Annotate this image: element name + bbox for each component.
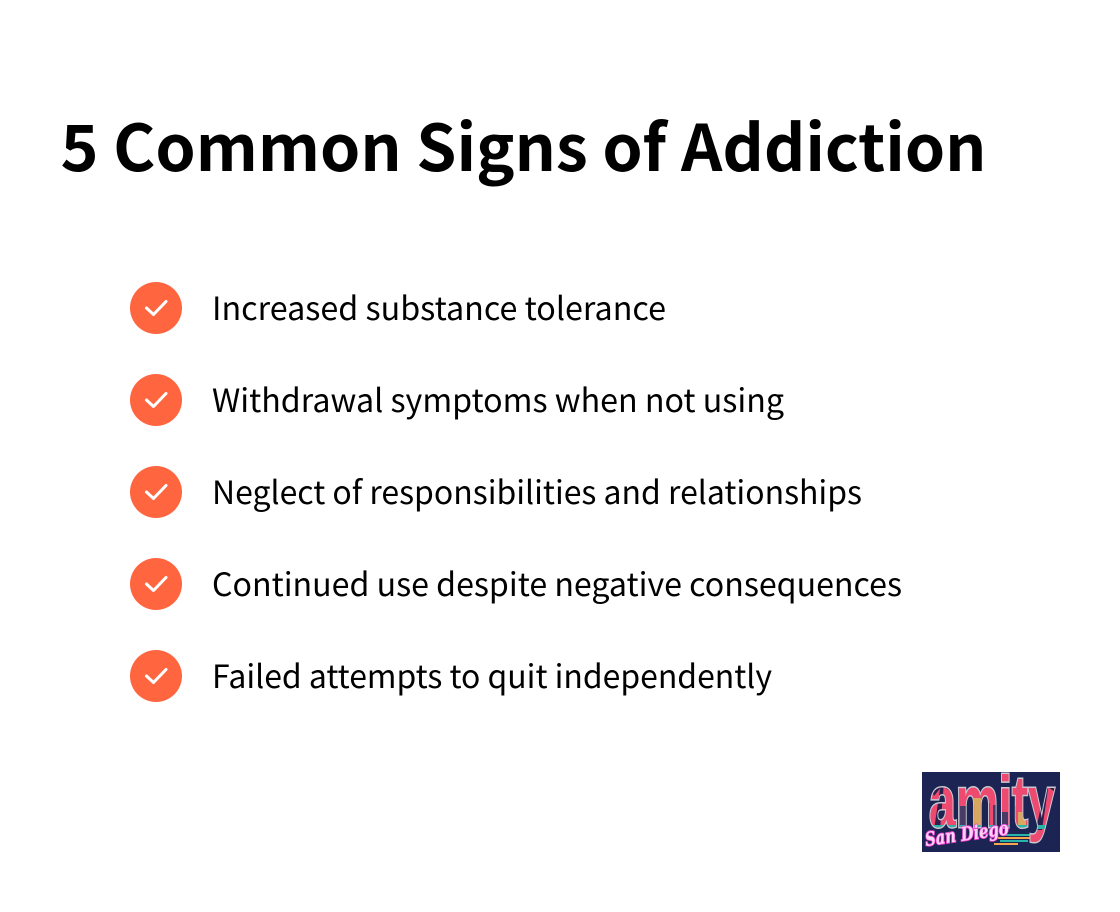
logo wordmark outline: amity: [929, 762, 1055, 844]
title: 5 Common Signs of Addiction: [60, 98, 986, 190]
logo script: San Diego: San Diego: [924, 817, 1010, 851]
checklist: [130, 282, 902, 702]
logo wordmark fill: amity: [929, 762, 1055, 844]
logo: Amity San Diego: [922, 772, 1060, 852]
logo beach stripes: [994, 834, 1040, 845]
item 1: Increased substance tolerance: [212, 284, 666, 330]
item 5: Failed attempts to quit independently: [212, 652, 772, 698]
logo skyline and palms: [933, 788, 1054, 830]
item 4: Continued use despite negative consequences: [212, 560, 902, 606]
item 2: Withdrawal symptoms when not using: [212, 376, 784, 422]
item 3: Neglect of responsibilities and relationships: [212, 468, 862, 514]
